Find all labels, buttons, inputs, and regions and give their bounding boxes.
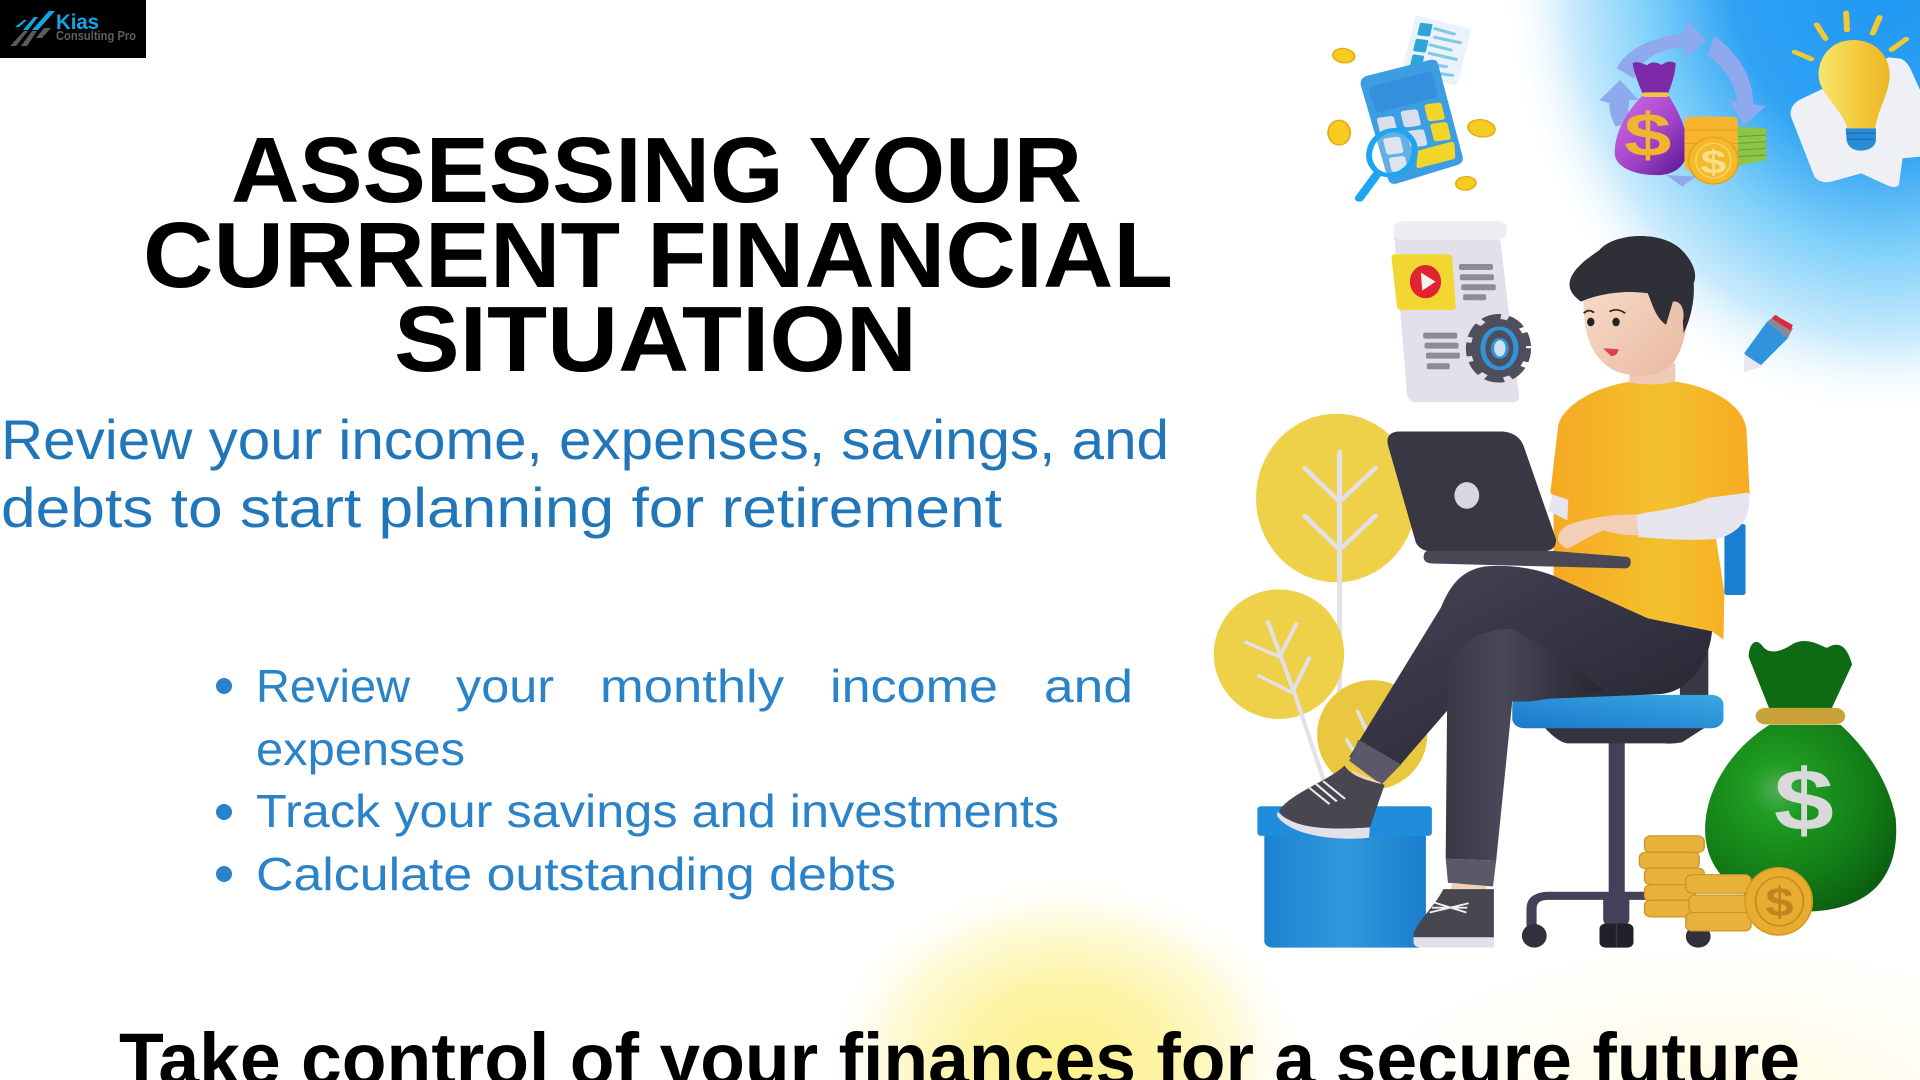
coins — [1328, 46, 1499, 192]
leg: lower — [1446, 629, 1604, 861]
magnifier — [1359, 127, 1420, 198]
title: SITUATION — [394, 287, 917, 391]
plant: medium leaf — [1214, 589, 1344, 781]
mouth — [1603, 348, 1619, 356]
background: cream bottom-right glow — [1200, 860, 1920, 1080]
illustration: head and pencil — [1569, 236, 1793, 384]
subtitle — [1, 408, 1169, 539]
neck — [1629, 363, 1675, 384]
plant: large leaf — [1256, 414, 1417, 692]
purple bag — [1615, 95, 1688, 175]
bullet 1: monthly — [600, 660, 784, 712]
laptop — [1387, 431, 1631, 568]
text lines — [1423, 264, 1496, 369]
shirt — [1550, 380, 1750, 640]
logo badge — [0, 0, 146, 58]
coin stacks — [1639, 836, 1751, 931]
green money bag — [1705, 641, 1896, 911]
rays — [1795, 13, 1906, 59]
logo badge: Kias — [56, 11, 99, 34]
icon: money bag with cycle arrows: $ — [1624, 100, 1671, 169]
bulb — [1819, 40, 1890, 128]
large coin — [1745, 868, 1812, 935]
icon: money bag with cycle arrows — [1600, 20, 1766, 187]
subtitle: Review your income, expenses, savings, and — [1, 408, 1169, 471]
bullet 1: income — [830, 660, 998, 712]
bullet list — [216, 660, 1133, 900]
coin stack — [1684, 117, 1738, 170]
logo badge: Consulting Pro — [56, 29, 136, 43]
eyes and brows — [1584, 310, 1625, 326]
illustration: plants, box and seated person — [1214, 380, 1896, 948]
bullet 1: expenses — [256, 723, 465, 775]
bullet 2: Track your savings and investments — [256, 785, 1059, 837]
bullet 1: and — [1044, 660, 1133, 712]
calculator body — [1361, 60, 1463, 184]
icon: light bulb in speech bubble — [1791, 13, 1920, 187]
large coin: $ — [1765, 879, 1794, 925]
green money bag: $ — [1774, 751, 1834, 849]
plant: small leaf — [1317, 680, 1427, 790]
shoe: planted foot — [1414, 883, 1494, 948]
icon: document with video and gear — [1391, 221, 1527, 402]
speech bubble — [1791, 57, 1920, 187]
trouser cuffs — [1349, 740, 1496, 887]
storage box — [1257, 806, 1432, 948]
scroll paper — [1394, 230, 1519, 402]
title — [143, 118, 1173, 391]
bullet 1: your — [456, 660, 554, 712]
checklist paper — [1402, 15, 1471, 85]
title: ASSESSING YOUR — [231, 118, 1082, 222]
title: CURRENT FINANCIAL — [143, 203, 1173, 307]
leg: crossed — [1349, 566, 1712, 764]
hair — [1569, 236, 1695, 333]
icon: calculator with checklist and coins — [1328, 15, 1499, 198]
subtitle: debts to start planning for retirement — [1, 476, 1002, 539]
video card — [1391, 254, 1456, 310]
cash — [1737, 127, 1766, 166]
background: blue corner glow — [1300, 0, 1920, 520]
ear — [1666, 301, 1684, 327]
arms — [1548, 492, 1749, 549]
bullet 3: Calculate outstanding debts — [256, 848, 896, 900]
bullet 1: Review — [256, 660, 411, 712]
face — [1583, 277, 1687, 376]
cycle arrows — [1600, 20, 1766, 187]
bullet 1 — [216, 660, 1133, 775]
icon: money bag with cycle arrows: $ — [1701, 143, 1726, 181]
chair — [1512, 524, 1746, 948]
pencil — [1744, 315, 1793, 372]
background: yellow bottom glow — [780, 840, 1380, 1080]
gear — [1470, 317, 1527, 380]
shoe: raised foot — [1277, 766, 1385, 839]
